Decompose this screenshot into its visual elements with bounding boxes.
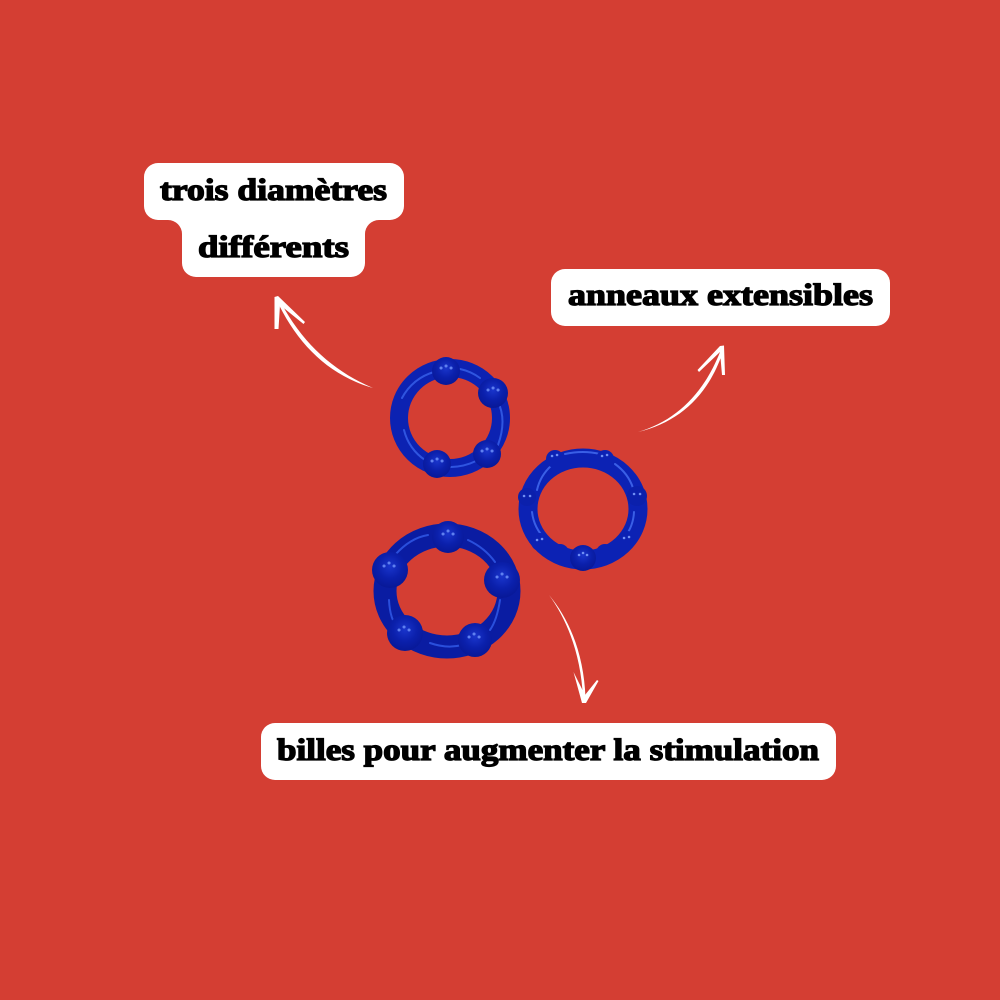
label: billes pour augmenter la stimulation [261, 723, 836, 780]
label: anneaux extensibles: anneaux extensibles [568, 277, 873, 312]
arrow: to trois diamètres [274, 296, 373, 388]
arrow: to billes pour augmenter [549, 595, 598, 703]
ring: medium, right [518, 450, 647, 571]
ring: small, top [399, 357, 508, 478]
label: trois diamètres différents: trois diamètres [160, 172, 387, 207]
arrow: to anneaux extensibles [638, 346, 725, 432]
label: anneaux extensibles [551, 269, 890, 326]
product image: three blue beaded rings [372, 357, 647, 657]
ring: large, bottom [372, 521, 520, 657]
label: billes pour augmenter la stimulation: billes pour augmenter la stimulation [277, 732, 819, 767]
label: trois diamètres différents [144, 163, 404, 277]
label: trois diamètres différents: différents [198, 229, 349, 264]
